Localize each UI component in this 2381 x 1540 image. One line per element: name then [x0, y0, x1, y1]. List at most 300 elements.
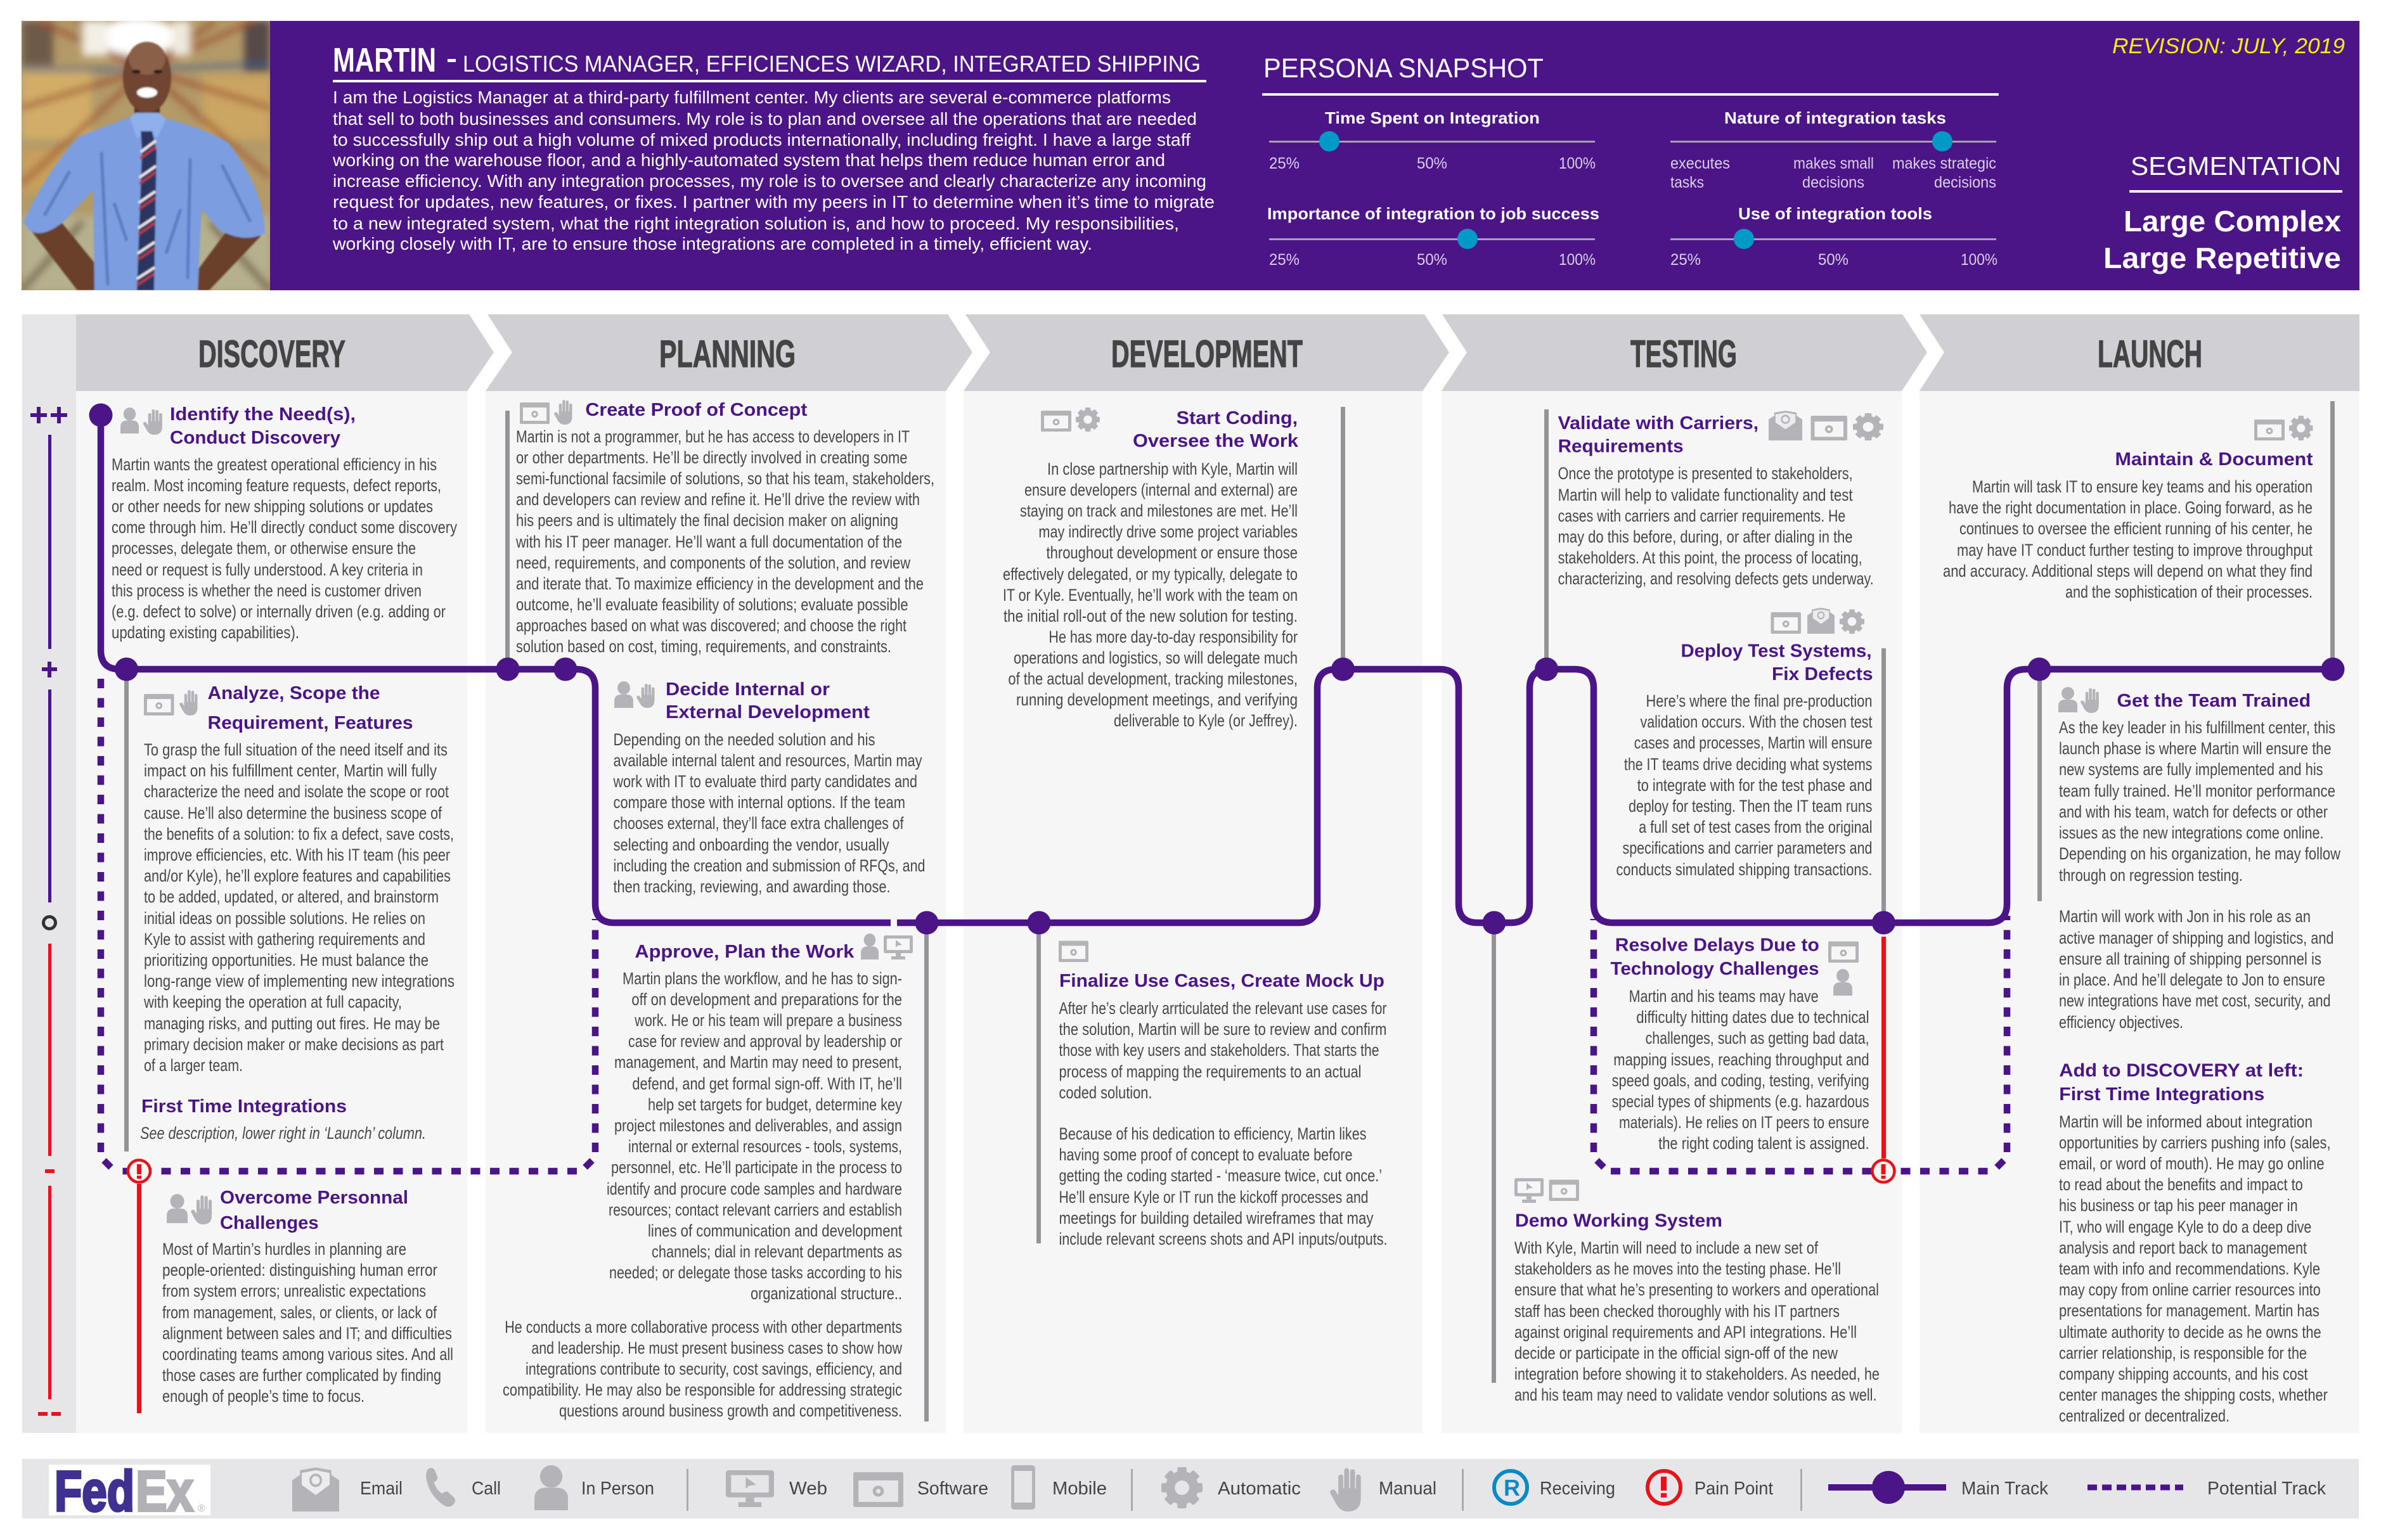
- phase header: launch: LAUNCH: [2098, 333, 2202, 375]
- panel: testing column: [1442, 391, 1902, 1433]
- persona description: [332, 87, 1215, 253]
- legend: email: Email: [360, 1479, 403, 1499]
- legend: main track: Main Track: [1961, 1479, 2048, 1499]
- slider: time spent on integration: 25%: [1269, 155, 1300, 172]
- body text: ensure all training of shipping personnel is: [2059, 949, 2321, 968]
- heading: [1610, 935, 1819, 979]
- body text: special types of shipments (e.g. hazardous: [1612, 1092, 1869, 1111]
- body text: cases with carriers and carrier requirements. He: [1558, 506, 1845, 525]
- step: validate with carriers: [1558, 411, 1883, 588]
- body text: IT or Kyle. Eventually, he’ll work with the team on: [1003, 586, 1298, 605]
- body text: primary decision maker or make decisions as part: [144, 1035, 444, 1054]
- segmentation: Large Complex: [2124, 205, 2341, 238]
- legend: pain point: [1648, 1471, 1773, 1504]
- heading: Fix Defects: [1772, 664, 1873, 684]
- legend: automatic: [1161, 1467, 1301, 1508]
- step: resolve delays: [1610, 935, 1869, 1153]
- body text: with keeping the operation at full capacity,: [143, 992, 402, 1011]
- fedex logo: ®: [198, 1503, 205, 1514]
- body text: ensure developers (internal and external) are: [1024, 480, 1298, 499]
- slider: nature of integration tasks: executes: [1670, 155, 1730, 172]
- slider: time spent on integration: Time Spent on Integration: [1325, 108, 1540, 127]
- body text: improve efficiencies, etc. With his IT team (his peer: [144, 845, 450, 864]
- persona photo: [22, 18, 270, 292]
- channel icons: [2254, 416, 2313, 440]
- legend: receiving: Receiving: [1540, 1479, 1615, 1499]
- legend: software: [853, 1472, 988, 1507]
- persona description: request for updates, new features, or fixes. I partner with my peers in IT to determine when it’s time to migrate: [333, 192, 1215, 212]
- body text: staff has been checked thoroughly with his IT partners: [1514, 1302, 1840, 1321]
- legend: pain point: Pain Point: [1694, 1479, 1773, 1499]
- phase header: discovery: DISCOVERY: [198, 333, 345, 375]
- body text: cases and processes, Martin will ensure: [1634, 733, 1873, 752]
- body text: his peers and is ultimately the final decision maker on aligning: [516, 511, 898, 530]
- legend: potential track: Potential Track: [2207, 1479, 2326, 1499]
- body text: with his IT peer manager. He’ll want a full documentation of the: [515, 532, 902, 551]
- step: deploy test systems: [1616, 608, 1873, 879]
- body text: [1616, 691, 1873, 879]
- body text: semi-functional facsimile of solutions, so that his team, stakeholders,: [516, 469, 934, 488]
- body text: or other needs for new shipping solutions or updates: [112, 497, 433, 516]
- body text: long-range view of implementing new integrations: [144, 972, 455, 991]
- body text: come through him. He’ll directly conduct some discovery: [112, 518, 457, 537]
- pain point marker: discovery: [128, 1160, 150, 1183]
- step: demo working system: [1514, 1178, 1880, 1404]
- body text: may indirectly drive some project variables: [1038, 522, 1298, 541]
- heading: Add to DISCOVERY at left:: [2059, 1061, 2304, 1081]
- step: create proof of concept: [515, 400, 934, 656]
- channel icons: [1041, 407, 1100, 432]
- heading: [1558, 413, 1758, 456]
- body text: Martin will help to validate functionality and test: [1558, 485, 1853, 504]
- body text: and the sophistication of their processes.: [2065, 582, 2313, 601]
- body text: needed; or delegate those tasks according to his: [609, 1263, 902, 1282]
- body text: [607, 969, 902, 1303]
- body text: [143, 740, 455, 1075]
- panel: launch column: [1920, 391, 2359, 1433]
- body text: new systems are fully implemented and his: [2059, 760, 2323, 779]
- body text: of the actual development, tracking milestones,: [1008, 669, 1298, 688]
- first time integrations note: First Time Integrations: [141, 1096, 347, 1117]
- step: decide internal or external: [613, 679, 926, 896]
- persona description: working closely with IT, are to ensure those integrations are completed in a timely, efficient way.: [332, 234, 1092, 253]
- body text: to be added, updated, or altered, and brainstorm: [144, 887, 439, 906]
- persona header panel: [22, 18, 2359, 292]
- body text: [1558, 464, 1874, 588]
- body text: managing risks, and putting out fires. He may be: [144, 1014, 440, 1033]
- persona snapshot heading: [1262, 53, 1999, 96]
- heading: Decide Internal or: [666, 679, 830, 700]
- body text: throughout development or ensure those: [1046, 543, 1298, 562]
- body text: Martin is not a programmer, but he has access to developers in IT: [516, 427, 910, 446]
- step: overcome personal challenges: [162, 1188, 453, 1406]
- slider: use of integration tools: 100%: [1961, 251, 1997, 269]
- heading: First Time Integrations: [2059, 1084, 2264, 1105]
- slider: use of integration tools: Use of integration tools: [1738, 204, 1932, 223]
- body text: the solution, Martin will be sure to review and confirm: [1059, 1020, 1387, 1039]
- body text: those cases are further complicated by finding: [162, 1366, 441, 1385]
- body text: In close partnership with Kyle, Martin will: [1047, 459, 1298, 478]
- heading: Oversee the Work: [1133, 431, 1299, 451]
- body text: process of mapping the requirements to an actual: [1059, 1062, 1362, 1081]
- body text: work. He or his team will prepare a business: [635, 1011, 902, 1030]
- slider: nature of integration tasks: makes small: [1793, 155, 1874, 172]
- heading: [1681, 641, 1873, 684]
- body text: prioritizing opportunities. He must balance the: [144, 951, 429, 970]
- phase header: development: DEVELOPMENT: [1111, 333, 1303, 375]
- potential track dashed: [101, 669, 2007, 1171]
- channel icons: [1828, 942, 1859, 996]
- body text: realm. Most incoming feature requests, defect reports,: [112, 476, 441, 495]
- fedex logo: [49, 1460, 210, 1524]
- body text: then tracking, reviewing, and awarding those.: [614, 877, 890, 896]
- fedex logo: Fed: [55, 1460, 134, 1524]
- body text: channels; dial in relevant departments as: [652, 1242, 902, 1261]
- body text: project milestones and deliverables, and assign: [614, 1116, 902, 1135]
- heading: Validate with Carriers,: [1558, 413, 1758, 433]
- body text: [112, 455, 457, 642]
- panel: planning column: [486, 391, 946, 1433]
- persona description: to successfully ship out a high volume of mixed products internationally, including freight. I have a large staff: [333, 130, 1190, 150]
- body text: updating existing capabilities).: [112, 623, 299, 642]
- body text: initial ideas on possible solutions. He relies on: [144, 909, 425, 928]
- segmentation: Large Repetitive: [2103, 241, 2341, 274]
- step: start coding: [1003, 407, 1299, 730]
- body text: issues as the new integrations come online.: [2059, 823, 2324, 842]
- legend: automatic: Automatic: [1218, 1479, 1301, 1499]
- legend: email: [292, 1468, 403, 1511]
- body text: outcome, he’ll evaluate feasibility of solutions; evaluate possible: [516, 595, 908, 614]
- channel icons: [1771, 608, 1864, 634]
- body text: coded solution.: [1059, 1083, 1152, 1102]
- body text: lines of communication and development: [648, 1221, 902, 1240]
- body text: IT, who will engage Kyle to do a deep dive: [2059, 1217, 2311, 1236]
- body text: stakeholders. At this point, the process of locating,: [1558, 548, 1862, 567]
- slider: time spent on integration: 50%: [1417, 155, 1447, 172]
- body text: Depending on the needed solution and his: [614, 730, 875, 749]
- body text: against original requirements and API integrations. He’ll: [1514, 1323, 1857, 1342]
- body text: collaboration: He conducts a more collaborative process with other departments: [505, 1318, 902, 1337]
- body text: through on regression testing.: [2059, 866, 2243, 885]
- body text: Once the prototype is presented to stakeholders,: [1558, 464, 1853, 483]
- body text: Martin will work with Jon in his role as an: [2059, 907, 2311, 926]
- red pain point connector lines: [137, 937, 1886, 1413]
- persona description: increase efficiency. With any integration processes, my role is to oversee and clearly characterize any incoming: [333, 171, 1206, 191]
- body text: the right coding talent is assigned.: [1658, 1134, 1869, 1153]
- slider: nature of integration tasks: makes strategic: [1892, 155, 1996, 172]
- heading: [170, 404, 356, 448]
- body text: collaboration: questions around business growth and competitiveness.: [559, 1401, 902, 1420]
- body text: materials). He relies on IT peers to ensure: [1619, 1113, 1869, 1132]
- body text: ensure that what he’s presenting to workers and operational: [1514, 1280, 1879, 1299]
- phase header: testing: TESTING: [1630, 333, 1737, 375]
- heading: Start Coding,: [1177, 408, 1298, 428]
- panel: development column: [964, 391, 1423, 1433]
- body text: mapping issues, reaching throughput and: [1613, 1050, 1869, 1069]
- body text: [2059, 1112, 2331, 1425]
- legend footer: [22, 1459, 2359, 1524]
- body text: and/or Kyle), he’ll explore features and capabilities: [144, 866, 451, 885]
- body text: meetings for building detailed wireframes that may: [1059, 1209, 1374, 1228]
- heading: [666, 679, 870, 722]
- legend: call: Call: [472, 1479, 501, 1499]
- channel icons: [2058, 687, 2099, 713]
- body text: [1003, 459, 1298, 730]
- body text: those with key users and stakeholders. That starts the: [1059, 1041, 1379, 1060]
- body text: integration before showing it to stakeholders. As needed, he: [1514, 1364, 1880, 1383]
- body text: having some proof of concept to evaluate before: [1059, 1145, 1353, 1164]
- body text: need, requirements, and components of the solution, and review: [516, 553, 910, 572]
- body text: carrier relationship, is responsible for the: [2059, 1344, 2307, 1363]
- legend: manual: [1330, 1468, 1436, 1511]
- fedex logo: Ex: [136, 1460, 193, 1524]
- body text: Martin plans the workflow, and he has to sign-: [623, 969, 902, 988]
- persona description: I am the Logistics Manager at a third-party fulfillment center. My clients are several e-commerce platforms: [333, 87, 1171, 107]
- legend: call: [426, 1468, 501, 1506]
- body text: speed goals, and coding, testing, verifying: [1612, 1071, 1869, 1090]
- heading: Overcome Personnal: [220, 1188, 408, 1208]
- slider: nature of integration tasks: [1670, 108, 1996, 191]
- body text: He has more day-to-day responsibility for: [1049, 627, 1298, 646]
- body text: processes, delegate them, or otherwise ensure the: [112, 539, 416, 558]
- heading: [208, 683, 413, 733]
- heading: Analyze, Scope the: [208, 683, 380, 703]
- body text: [1612, 987, 1869, 1153]
- heading: Finalize Use Cases, Create Mock Up: [1059, 971, 1384, 991]
- body text: getting the coding started - ‘measure twice, cut once.’: [1059, 1166, 1382, 1185]
- panel: discovery column: [76, 391, 467, 1433]
- body text: impact on his fulfillment center, Martin will fully: [144, 761, 437, 780]
- body text: and his team may need to validate vendor solutions as well.: [1514, 1385, 1876, 1404]
- step: add to discovery: [2059, 1061, 2331, 1425]
- body text: coordinating teams among various sites. And all: [162, 1345, 453, 1364]
- body text: this process is whether the need is customer driven: [112, 581, 422, 600]
- legend: web: [726, 1470, 827, 1507]
- body text: include relevant screens shots and API inputs/outputs.: [1059, 1229, 1387, 1248]
- slider: importance of integration: 100%: [1559, 251, 1596, 269]
- body text: Most of Martin’s hurdles in planning are: [162, 1240, 406, 1259]
- step: finalize use cases: [1059, 940, 1387, 1248]
- heading: Deploy Test Systems,: [1681, 641, 1871, 662]
- heading: Approve, Plan the Work: [635, 942, 855, 962]
- body text: resources; contact relevant carriers and establish: [609, 1200, 902, 1219]
- channel icons: [1514, 1178, 1579, 1203]
- slider: nature of integration tasks: Nature of integration tasks: [1724, 108, 1946, 127]
- channel icons: [144, 690, 197, 715]
- body text: Martin and his teams may have: [1629, 987, 1819, 1006]
- channel icons: [520, 400, 572, 425]
- body text: the initial roll-out of the new solution for testing.: [1003, 606, 1298, 626]
- body text: or other departments. He’ll be directly involved in creating some: [516, 448, 908, 467]
- channel icon: [1059, 940, 1088, 962]
- heading: External Development: [666, 702, 870, 722]
- body text: stakeholders as he moves into the testing phase. He’ll: [1514, 1259, 1841, 1278]
- body text: collaboration: [503, 1318, 902, 1420]
- body text: and iterate that. To maximize efficiency in the development and the: [516, 574, 924, 593]
- body text: centralized or decentralized.: [2059, 1406, 2229, 1425]
- step: analyze, scope: [140, 683, 455, 1143]
- body text: After he’s clearly arrticulated the relevant use cases for: [1059, 999, 1387, 1018]
- persona description: working on the warehouse floor, and a highly-automated system that helps them reduce human error and: [332, 150, 1165, 170]
- step: approve, plan the work: [503, 934, 913, 1420]
- body text: defend, and get formal sign-off. With IT, he’ll: [632, 1074, 902, 1093]
- body text: from management, sales, or clients, or lack of: [162, 1303, 437, 1322]
- body text: the benefits of a solution: to fix a defect, save costs,: [144, 825, 454, 844]
- persona description: that sell to both businesses and consumers. My role is to plan and oversee all the operations that are needed: [333, 109, 1197, 129]
- body text: efficiency objectives.: [2059, 1013, 2183, 1032]
- step: identify the need: [112, 404, 457, 642]
- body text: validation occurs. With the chosen test: [1641, 712, 1873, 731]
- body text: collaboration: integrations contribute to security, cost savings, efficiency, and: [526, 1359, 902, 1378]
- heading: Technology Challenges: [1610, 959, 1819, 979]
- body text: people-oriented: distinguishing human error: [162, 1261, 437, 1280]
- body text: may do this before, during, or after dialing in the: [1558, 527, 1853, 546]
- legend: in person: In Person: [581, 1479, 654, 1499]
- body text: management, and Martin may need to present,: [614, 1053, 902, 1072]
- body text: deliverable to Kyle (or Jeffrey).: [1114, 711, 1298, 730]
- body text: collaboration: and leadership. He must present business cases to show how: [531, 1338, 902, 1357]
- heading: Conduct Discovery: [170, 428, 340, 448]
- body text: presentations for management. Martin has: [2059, 1301, 2320, 1320]
- phase header: planning: PLANNING: [659, 333, 796, 375]
- body text: challenges, such as getting bad data,: [1646, 1029, 1869, 1048]
- heading: [220, 1188, 408, 1233]
- body text: alignment between sales and IT; and difficulties: [162, 1324, 452, 1343]
- body text: compare those with internal options. If the team: [614, 793, 905, 812]
- body text: [515, 427, 934, 656]
- body text: Kyle to assist with gathering requirements and: [144, 930, 425, 949]
- body text: solution based on cost, timing, requirements, and constraints.: [516, 637, 891, 656]
- body text: staying on track and milestones are met. He’ll: [1020, 501, 1298, 520]
- body text: personnel, etc. He’ll participate in the process to: [611, 1158, 902, 1177]
- body text: [1943, 477, 2313, 601]
- persona description: to a new integrated system, what the right integration solution is, and how to proceed. My responsibilities,: [333, 214, 1179, 233]
- body text: [1059, 999, 1387, 1248]
- body text: work with IT to evaluate third party candidates and: [613, 772, 917, 791]
- slider: importance of integration: [1267, 204, 1599, 269]
- body text: from system errors; unrealistic expectations: [162, 1281, 426, 1300]
- body text: case for review and approval by leadership or: [628, 1032, 902, 1051]
- body text: He’ll ensure Kyle or IT run the kickoff processes and: [1059, 1188, 1368, 1207]
- heading: Demo Working System: [1515, 1210, 1722, 1231]
- body text: to read about the benefits and impact to: [2059, 1175, 2303, 1194]
- slider: importance of integration: Importance of integration to job success: [1267, 204, 1599, 223]
- body text: conducts simulated shipping transactions.: [1616, 860, 1873, 879]
- left sentiment strip background: [22, 314, 76, 1433]
- legend: mobile: [1011, 1465, 1107, 1510]
- pain point marker: testing: [1873, 1160, 1894, 1183]
- body text: (e.g. defect to solve) or internally driven (e.g. adding or: [112, 602, 446, 621]
- body text: help set targets for budget, determine key: [648, 1095, 902, 1114]
- slider: use of integration tools: [1670, 204, 1997, 269]
- heading: [2059, 1061, 2304, 1105]
- body text: chooses external, they’ll face extra challenges of: [614, 814, 904, 833]
- legend: web: Web: [789, 1479, 827, 1499]
- body text: his business or tap his peer manager in: [2059, 1196, 2298, 1215]
- legend: manual: Manual: [1379, 1479, 1436, 1499]
- body text: selecting and onboarding the vendor, usually: [614, 835, 889, 854]
- body text: cause. He’ll also determine the business scope of: [144, 804, 442, 823]
- body text: internal or external resources - tools, systems,: [628, 1137, 902, 1156]
- slider: importance of integration: 25%: [1269, 251, 1300, 269]
- slider: nature of integration tasks: decisions: [1934, 174, 1996, 191]
- legend: main track: [1828, 1471, 2048, 1504]
- step: maintain and document: [1943, 416, 2313, 601]
- slider: use of integration tools: 50%: [1818, 251, 1849, 269]
- body text: Martin wants the greatest operational efficiency in his: [112, 455, 437, 474]
- body text: [613, 730, 926, 896]
- body text: To grasp the full situation of the need itself and its: [144, 740, 448, 759]
- body text: including the creation and submission of RFQs, and: [614, 856, 926, 875]
- slider: time spent on integration: 100%: [1559, 155, 1596, 172]
- body text: collaboration: compatibility. He may also be responsible for addressing strategic: [503, 1380, 902, 1399]
- channel icons: [861, 934, 913, 959]
- body text: email, or word of mouth). He may go online: [2059, 1154, 2324, 1173]
- body text: the IT teams drive deciding what systems: [1624, 755, 1873, 774]
- sentiment scale: [30, 407, 67, 1416]
- body text: a full set of test cases from the original: [1639, 818, 1873, 837]
- body text: company shipping accounts, and his cost: [2059, 1364, 2308, 1383]
- body text: of a larger team.: [144, 1056, 243, 1075]
- main track: [89, 403, 2344, 934]
- legend: receiving: R: [1504, 1475, 1520, 1501]
- body text: characterize the need and isolate the scope or root: [144, 782, 449, 801]
- body text: in place. And he’ll delegate to Jon to ensure: [2059, 970, 2325, 989]
- slider: nature of integration tasks: decisions: [1802, 174, 1864, 191]
- legend: in person: [534, 1465, 654, 1510]
- phase header: launch: [1920, 314, 2359, 391]
- body text: Here’s where the final pre-production: [1646, 691, 1873, 710]
- slider: time spent on integration: [1269, 108, 1596, 172]
- body text: difficulty hitting dates due to technical: [1636, 1008, 1869, 1027]
- grey stage connector lines: [124, 401, 2335, 1421]
- body text: [162, 1240, 453, 1406]
- body text: effectively delegated, or my typically, delegate to: [1003, 565, 1298, 584]
- segmentation: [2103, 151, 2342, 274]
- body text: running development meetings, and verifying: [1016, 690, 1298, 709]
- channel icons: [1769, 411, 1883, 440]
- body text: need or request is fully understood. A key criteria in: [112, 560, 423, 579]
- heading: Challenges: [220, 1213, 319, 1233]
- body text: [1514, 1238, 1880, 1404]
- legend: mobile: Mobile: [1052, 1479, 1107, 1499]
- body text: off on development and preparations for the: [631, 990, 902, 1009]
- channel icons: [614, 681, 654, 708]
- body text: specifications and carrier parameters and: [1623, 838, 1873, 857]
- title: MARTIN: [333, 41, 436, 79]
- body text: may copy from online carrier resources into: [2059, 1280, 2321, 1299]
- body text: available internal talent and resources, Martin may: [614, 751, 922, 770]
- body text: enough of people’s time to focus.: [162, 1387, 365, 1406]
- slider: use of integration tools: 25%: [1670, 251, 1701, 269]
- heading: Identify the Need(s),: [170, 404, 356, 425]
- slider: importance of integration: 50%: [1417, 251, 1447, 269]
- body text: [2059, 718, 2340, 1032]
- segmentation: SEGMENTATION: [2131, 151, 2341, 181]
- channel icons: [120, 407, 162, 435]
- body text: Because of his dedication to efficiency, Martin likes: [1059, 1124, 1367, 1143]
- persona snapshot heading: PERSONA SNAPSHOT: [1263, 53, 1544, 84]
- phase header: development: [964, 314, 1449, 391]
- phase header: testing: [1442, 314, 1927, 391]
- phase header: planning: [486, 314, 972, 391]
- heading: [1133, 408, 1299, 451]
- phase header: discovery: [76, 314, 494, 391]
- step: get the team trained: [2058, 687, 2340, 1032]
- slider: nature of integration tasks: tasks: [1670, 174, 1704, 191]
- body text: approaches based on what was discovered; and choose the right: [516, 616, 907, 635]
- body text: and developers can review and refine it. He’ll drive the review with: [516, 490, 920, 509]
